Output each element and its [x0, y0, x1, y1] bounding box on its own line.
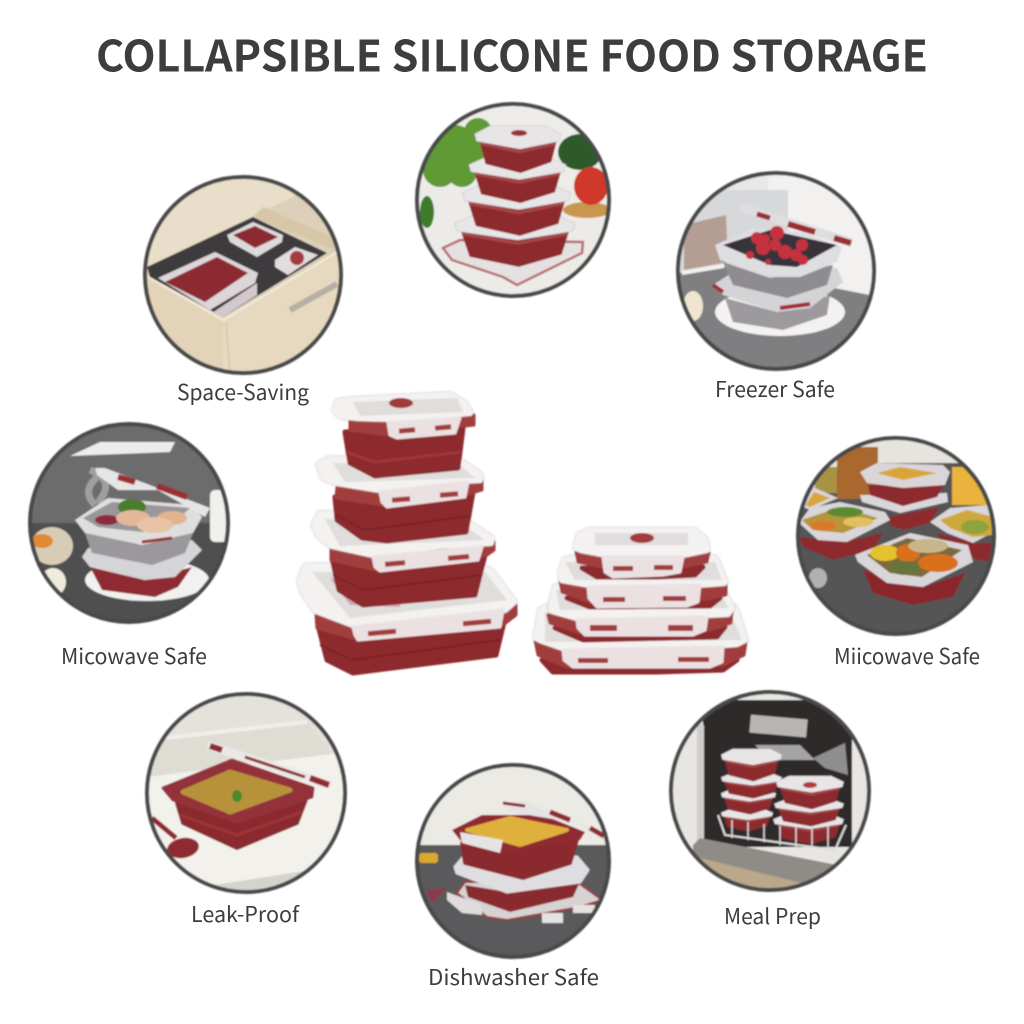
container 3 — [314, 514, 494, 605]
flat container 1 — [576, 531, 709, 577]
flat container 2 — [560, 558, 726, 607]
central product: flat collapsed stack of four containers — [535, 531, 746, 672]
panel: meal prep dishwasher — [670, 690, 872, 892]
container 1 — [335, 395, 474, 476]
container 4 — [300, 566, 516, 673]
flat container 3 — [548, 585, 732, 640]
label: Leak-Proof: Leak-Proof — [191, 898, 300, 929]
panel: meal prep containers right — [796, 436, 998, 640]
panel: microwave safe left — [28, 423, 230, 625]
label: Dishwasher Safe: Dishwasher Safe — [428, 961, 599, 992]
label: Micowave Safe left: Micowave Safe — [61, 640, 207, 671]
label: Meal Prep: Meal Prep — [724, 900, 821, 931]
label: Miicowave Safe right: Miicowave Safe — [834, 640, 980, 671]
panel: stacked containers on counter — [415, 100, 615, 300]
panel: freezer safe — [670, 170, 880, 378]
label: Space-Saving: Space-Saving — [177, 376, 309, 407]
flat container 4 — [535, 606, 746, 672]
label: Freezer Safe: Freezer Safe — [715, 373, 835, 404]
container 2 — [319, 459, 482, 541]
panel: space-saving drawer — [140, 176, 348, 380]
panel: dishwasher safe — [415, 762, 613, 960]
panel: leak-proof — [146, 692, 348, 894]
title: COLLAPSIBLE SILICONE FOOD STORAGE — [96, 22, 928, 84]
central product: tall stack of four containers — [300, 395, 516, 673]
